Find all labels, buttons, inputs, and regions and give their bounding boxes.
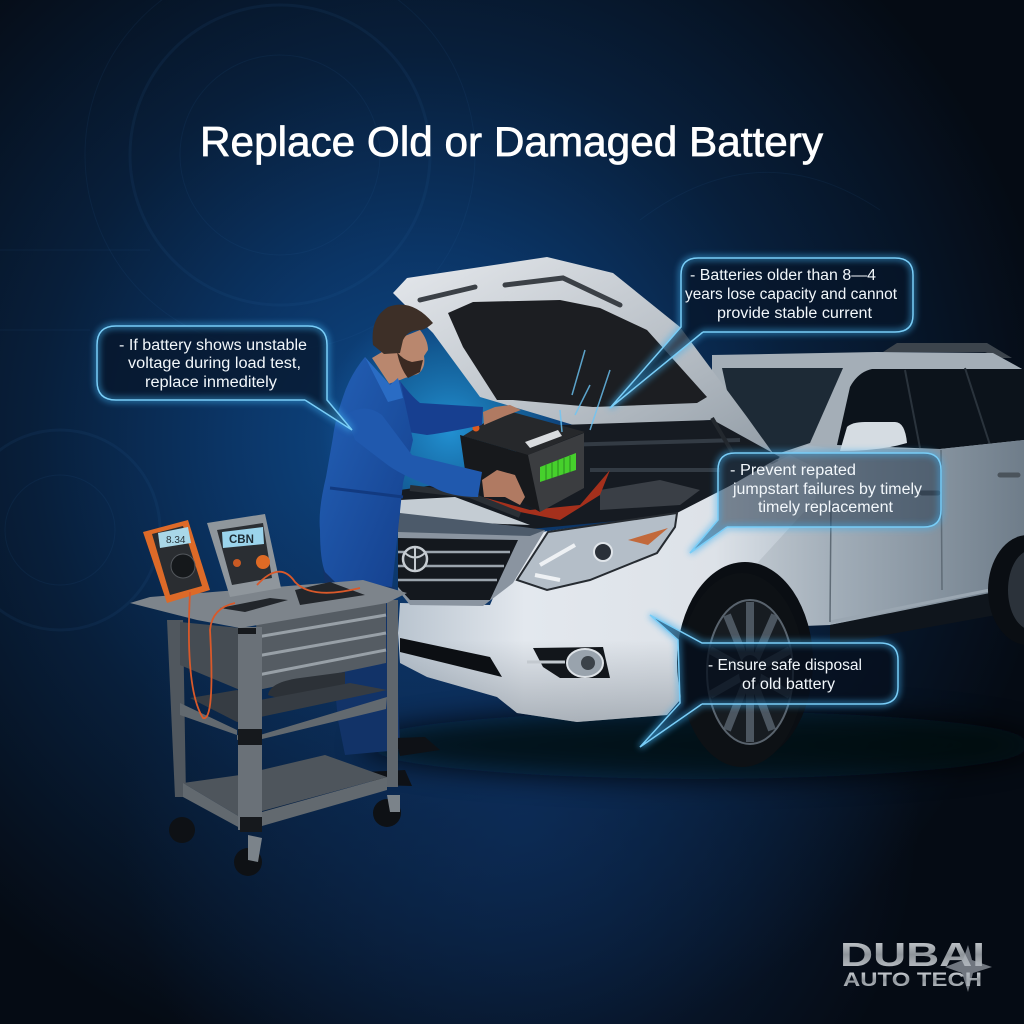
mechanic	[320, 305, 525, 786]
shelf contents	[268, 672, 345, 705]
legs	[323, 567, 400, 755]
middle shelf	[180, 697, 387, 740]
fog lamp	[527, 647, 610, 678]
test leads	[189, 572, 360, 718]
callout: safe disposal	[640, 615, 898, 747]
callout: unstable voltage: voltage during load test,	[128, 355, 301, 372]
side body	[690, 440, 1024, 630]
front leg	[238, 627, 262, 830]
sparks above battery	[560, 350, 610, 432]
side windows	[837, 369, 1024, 449]
car shadow	[360, 711, 1024, 779]
roof rail	[883, 343, 1012, 358]
rocker	[830, 575, 1024, 645]
callout: safe disposal: of old battery	[742, 676, 835, 693]
front arm	[345, 408, 482, 497]
drawers	[256, 603, 386, 690]
callout: safe disposal: - Ensure safe disposal	[708, 657, 862, 674]
logo: DUBAI	[840, 936, 985, 973]
digital multimeter: 8.34	[166, 535, 186, 546]
callout: jumpstart failures: timely replacement	[758, 499, 894, 516]
bench meter	[207, 514, 281, 597]
hands	[483, 405, 521, 425]
callout: battery age	[610, 258, 913, 408]
rear wheel	[988, 535, 1024, 645]
shoes	[395, 737, 440, 756]
callout: unstable voltage	[97, 326, 352, 430]
mirror	[840, 422, 907, 451]
rear arm	[395, 377, 483, 435]
roof	[712, 352, 1024, 470]
service cart	[130, 580, 407, 876]
open hood	[393, 257, 785, 470]
door lines and handles	[830, 450, 942, 622]
lower grille	[400, 638, 502, 677]
engine bay	[400, 418, 780, 530]
title: Replace Old or Damaged Battery	[200, 118, 823, 165]
callout: battery age: - Batteries older than 8—4	[690, 267, 876, 284]
wheel arch	[677, 562, 813, 762]
emblem	[403, 547, 427, 571]
front wheel	[680, 573, 804, 767]
hair	[373, 305, 433, 354]
windshield	[722, 368, 843, 453]
neck and face	[372, 330, 428, 385]
callout: battery age: provide stable current	[717, 305, 873, 322]
battery	[460, 410, 585, 512]
casters	[169, 817, 195, 843]
drawer side	[180, 622, 240, 690]
callout: unstable voltage: - If battery shows unstable	[119, 337, 307, 354]
headlight	[517, 513, 677, 590]
car front: bumper, fender, grille, headlight	[398, 455, 820, 762]
callout: battery age: years lose capacity and cannot	[685, 286, 898, 303]
logo	[840, 936, 992, 992]
rear legs	[167, 620, 186, 797]
collar	[365, 357, 403, 402]
bench meter: CBN	[229, 534, 254, 546]
torso	[320, 357, 413, 587]
bottom shelf	[183, 755, 387, 817]
logo: AUTO TECH	[843, 970, 982, 991]
belt gather	[330, 488, 403, 497]
car: cabin and side body	[690, 343, 1024, 645]
callout: jumpstart failures: jumpstart failures by timely	[732, 481, 922, 498]
digital multimeter	[143, 520, 210, 603]
callout: unstable voltage: replace inmeditely	[145, 374, 277, 391]
top plate	[130, 580, 407, 628]
callout: jumpstart failures: - Prevent repated	[730, 462, 856, 479]
callout: jumpstart failures	[690, 453, 941, 553]
front bumper	[398, 455, 820, 722]
tools on tray	[220, 582, 365, 612]
grille	[398, 513, 545, 606]
